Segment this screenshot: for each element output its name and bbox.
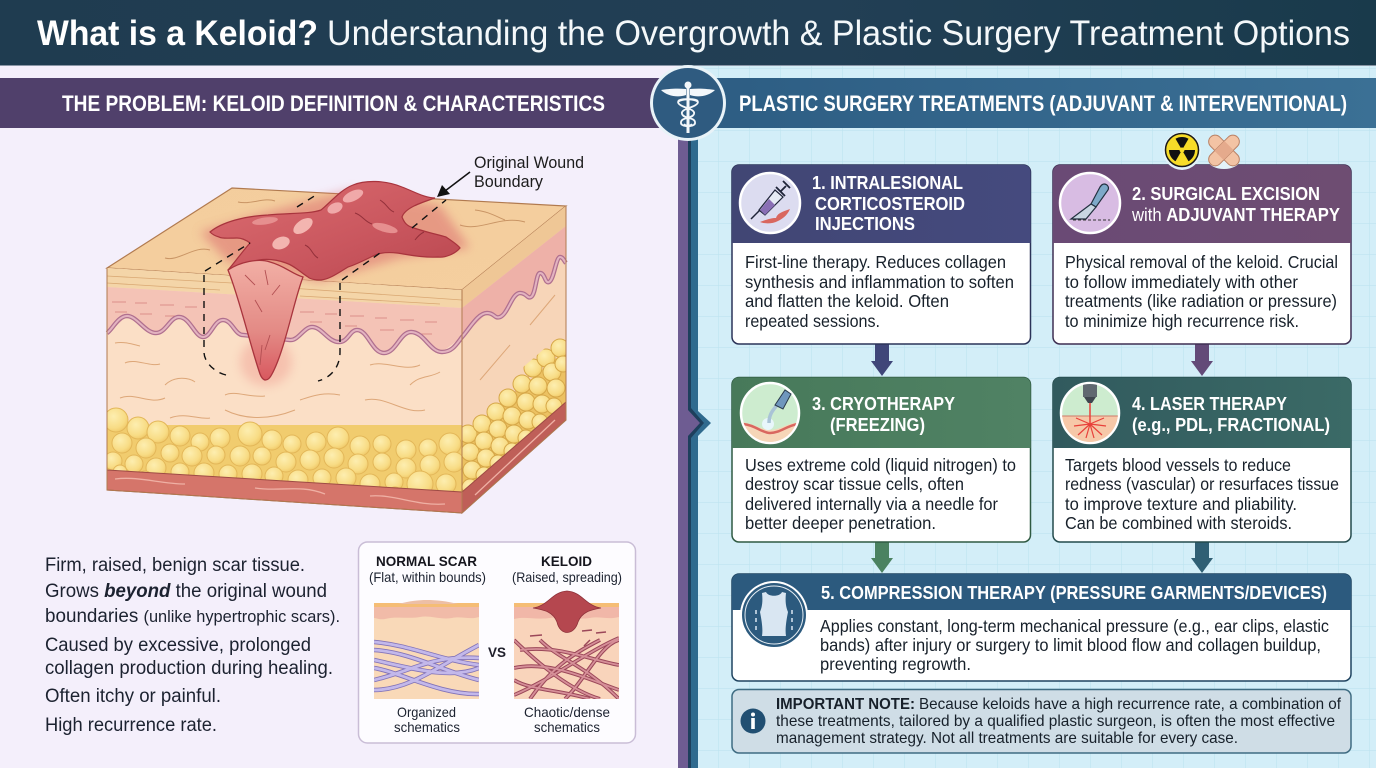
caption: organized: schematics: [394, 719, 460, 735]
text block: keloid characteristics: Often itchy or painful.: [45, 686, 221, 707]
card 4 body: redness (vascular) or resurfaces tissue: [1065, 474, 1339, 494]
diagram: keloid: [514, 591, 619, 699]
card 1 title: CORTICOSTEROID: [815, 193, 965, 214]
card 5 body: bands) after injury or surgery to limit blood flow and collagen buildup,: [820, 635, 1321, 655]
epidermis layers: [107, 206, 566, 308]
card 5: compression therapy: [732, 574, 1351, 681]
caption: organized: [394, 704, 460, 735]
card 3 body: better deeper penetration.: [745, 513, 936, 533]
icon: bandage: [1206, 132, 1242, 169]
card 4 title: (e.g., PDL, FRACTIONAL): [1132, 414, 1330, 435]
heading: keloid: (Raised, spreading): [512, 569, 622, 585]
card 5 title: 5. COMPRESSION THERAPY (PRESSURE GARMENTS/DEVICES): [821, 582, 1327, 603]
card 4 body: Can be combined with steroids.: [1065, 513, 1292, 533]
central divider with chevron: [678, 128, 711, 768]
card 4 body: [1065, 455, 1339, 533]
icon: syringe: [740, 173, 800, 233]
right face: dermis: [462, 206, 566, 492]
text block: keloid characteristics: Grows beyond the original wound: [45, 581, 327, 602]
label: original wound boundary: Original Wound: [474, 154, 584, 172]
card 1: intralesional injections: [732, 165, 1030, 344]
title banner: [0, 0, 1376, 66]
block outline: [107, 206, 566, 513]
heading: treatments: [697, 78, 1376, 128]
heading: keloid: [512, 553, 622, 585]
keloid mass: [210, 181, 460, 380]
card 2 body: to follow immediately with other: [1065, 272, 1298, 292]
label: vs: VS: [488, 644, 506, 660]
card 3: cryotherapy: [732, 378, 1030, 542]
text block: keloid characteristics: Firm, raised, benign scar tissue.: [45, 555, 305, 576]
card 2: surgical excision: [1053, 165, 1351, 344]
card 5 body: [820, 616, 1329, 674]
icon: info: [740, 708, 766, 734]
card 2 body: to minimize high recurrence risk.: [1065, 311, 1299, 331]
icon: compression vest: [740, 581, 808, 649]
dashed wound boundary: [204, 195, 446, 381]
note text: [776, 696, 1342, 747]
arrow: card 4 to 5: [1191, 542, 1213, 573]
wavy basement line: [107, 257, 566, 353]
card 4: laser therapy: [1053, 378, 1351, 542]
card 4 body: Targets blood vessels to reduce: [1065, 455, 1291, 475]
card 4 title: 4. LASER THERAPY: [1132, 393, 1288, 414]
card 1 body: First-line therapy. Reduces collagen: [745, 252, 1006, 272]
text block: keloid characteristics: collagen production during healing.: [45, 658, 333, 679]
papillary dermis: [107, 226, 566, 353]
icon: caduceus medallion: [650, 65, 726, 141]
note text: Because keloids have a high recurrence rate, a combination of: [919, 696, 1342, 713]
card 2 body: Physical removal of the keloid. Crucial: [1065, 252, 1338, 272]
icon: scalpel: [1060, 173, 1120, 233]
arrows between cards: [871, 344, 1213, 573]
card 4 body: to improve texture and pliability.: [1065, 494, 1297, 514]
heading: normal scar: NORMAL SCAR: [376, 553, 477, 569]
background: right panel with grid: [690, 66, 1376, 768]
muscle layer: [107, 402, 566, 513]
arrow: card 3 to 5: [871, 542, 893, 573]
caption: chaotic: Chaotic/dense: [524, 704, 610, 720]
arrow: card 2 to 4: [1191, 344, 1213, 376]
card 3 title: 3. CRYOTHERAPY: [812, 393, 956, 414]
panel: normal scar vs keloid: [358, 542, 636, 743]
icons: radiation and bandage: [1163, 132, 1242, 170]
icon: radiation: [1163, 132, 1201, 170]
text block: keloid characteristics: boundaries (unlike hypertrophic scars).: [45, 606, 340, 627]
text block: keloid characteristics: Caused by excessive, prolonged: [45, 635, 311, 656]
top surface: [107, 188, 566, 290]
root halo: [240, 338, 292, 386]
keloid bump: [533, 591, 601, 632]
title: subtitle: Understanding the Overgrowth & Plastic Surgery Treatment Options: [327, 14, 1350, 53]
arrow: card 1 to 3: [871, 344, 893, 376]
card 4 title: [1132, 393, 1330, 435]
heading: keloid: KELOID: [541, 553, 592, 569]
keloid halo: [200, 190, 470, 282]
label: original wound boundary: Boundary: [474, 173, 544, 191]
heading: normal scar: [369, 553, 486, 585]
card 1 title: INJECTIONS: [815, 213, 915, 234]
card 1 body: [745, 252, 1014, 331]
background: left panel: [0, 66, 690, 768]
illustration: skin cross-section: [104, 181, 571, 513]
card 1 body: synthesis and inflammation to soften: [745, 272, 1014, 292]
heading: the problem: THE PROBLEM: KELOID DEFINITION & CHARACTERISTICS: [62, 91, 605, 116]
title: bold lead: What is a Keloid?: [37, 14, 318, 53]
label: original wound boundary: [437, 154, 584, 197]
caption: organized: Organized: [397, 704, 456, 720]
card 3 body: delivered internally via a needle for: [745, 494, 998, 514]
card 3 title: (FREEZING): [830, 414, 925, 435]
card 3 body: Uses extreme cold (liquid nitrogen) to: [745, 455, 1016, 475]
heading: the problem: [0, 78, 670, 128]
keloid root: [228, 260, 303, 380]
card 2 title: with ADJUVANT THERAPY: [1131, 204, 1341, 225]
caption: chaotic: schematics: [534, 719, 600, 735]
icon: laser: [1061, 383, 1119, 446]
card 5 body: preventing regrowth.: [820, 654, 971, 674]
note text: these treatments, tailored by a qualified plastic surgeon, is often the most effective: [776, 713, 1335, 730]
text block: keloid characteristics: [45, 555, 340, 736]
card 1 body: repeated sessions.: [745, 311, 880, 331]
fat layer: [104, 339, 571, 501]
diagram: normal scar: [374, 600, 479, 699]
front face: dermis: [107, 268, 462, 492]
card 3 body: destroy scar tissue cells, often: [745, 474, 964, 494]
heading: normal scar: (Flat, within bounds): [369, 569, 486, 585]
card 1 title: 1. INTRALESIONAL: [812, 172, 963, 193]
card 5 body: Applies constant, long-term mechanical pressure (e.g., ear clips, elastic: [820, 616, 1329, 636]
caption: chaotic: [524, 704, 610, 735]
card 1 body: and flatten the keloid. Often: [745, 291, 949, 311]
card 1 title: [812, 172, 965, 234]
surface wrinkles: [165, 200, 525, 259]
icon: cryo probe: [741, 383, 800, 445]
text block: keloid characteristics: High recurrence rate.: [45, 715, 217, 736]
arrow: to wound boundary: [437, 172, 470, 197]
card 2 title: 2. SURGICAL EXCISION: [1132, 183, 1320, 204]
note text: IMPORTANT NOTE:: [776, 696, 915, 713]
keloid highlights: [341, 187, 365, 205]
dermis fibres: [115, 295, 555, 428]
callout: important note: [732, 690, 1351, 753]
card 2 body: treatments (like radiation or pressure): [1065, 291, 1337, 311]
note text: management strategy. Not all treatments are suitable for every case.: [776, 730, 1238, 747]
card 2 title: [1131, 183, 1341, 225]
card 2 body: [1065, 252, 1338, 331]
card 3 body: [745, 455, 1016, 533]
card 3 title: [812, 393, 956, 435]
